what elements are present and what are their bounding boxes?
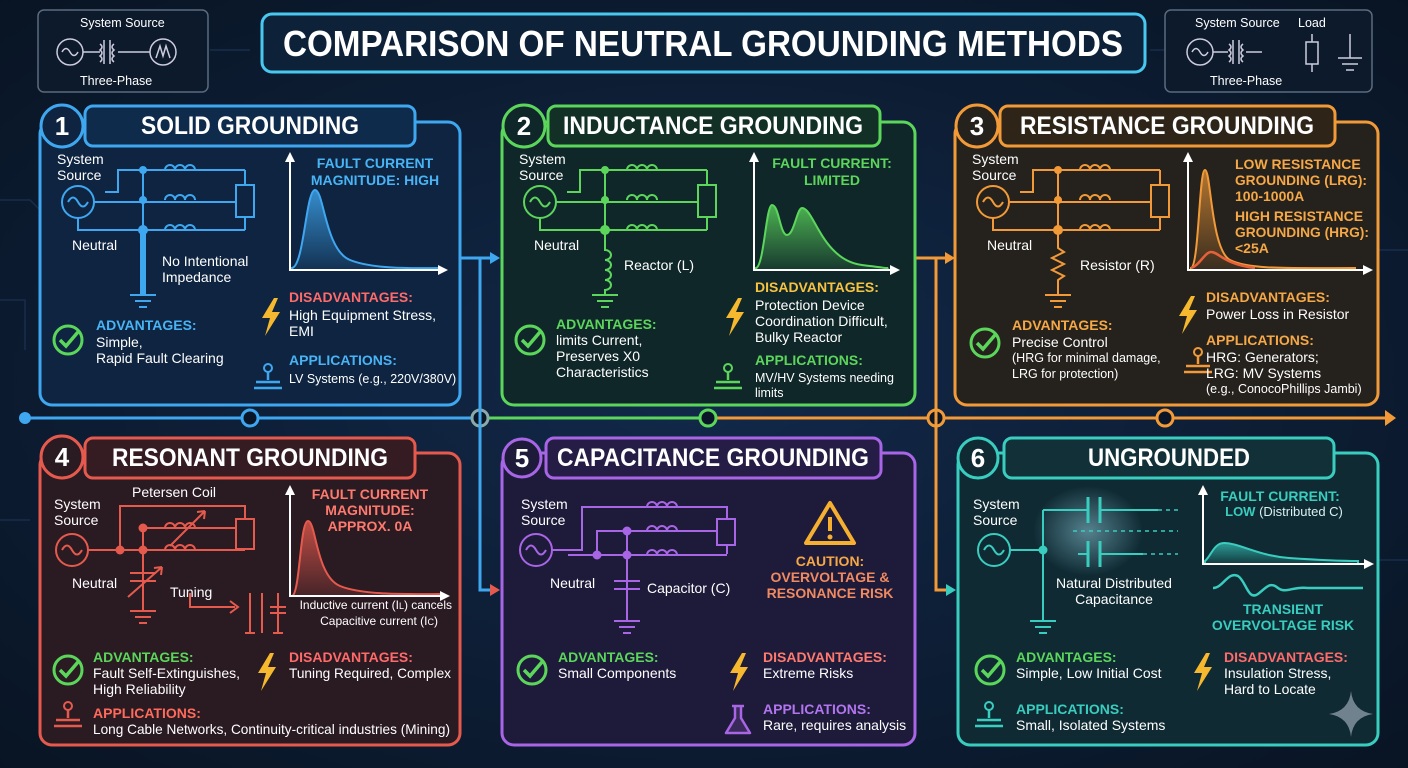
advantages 1: ADVANTAGES: bbox=[96, 317, 197, 333]
connector bus lines bbox=[19, 252, 1396, 596]
panel 6: ungrounded bbox=[958, 438, 1378, 745]
corner diagram: left: Three-Phase bbox=[80, 74, 152, 88]
panel 1: solid grounding: Impedance bbox=[162, 269, 231, 285]
chart 1: FAULT CURRENT bbox=[317, 155, 434, 171]
circuit 4 bbox=[56, 506, 286, 633]
corner diagram: right: Three-Phase bbox=[1210, 74, 1282, 88]
advantages 5 bbox=[518, 649, 676, 684]
number badge 3: 3 bbox=[970, 111, 984, 141]
applications 5 (flask) bbox=[726, 701, 906, 733]
header 5 bbox=[546, 438, 881, 478]
applications 2 bbox=[714, 352, 894, 400]
applications 3: APPLICATIONS: bbox=[1206, 332, 1314, 348]
panel 4: resonant grounding: Petersen Coil bbox=[132, 484, 216, 500]
chart 6: TRANSIENT bbox=[1243, 601, 1323, 617]
panel 1: solid grounding bbox=[40, 105, 460, 405]
chart 6: FAULT CURRENT: bbox=[1220, 488, 1340, 504]
circuit 6 bbox=[978, 486, 1178, 633]
chart 6: LOW (Distributed C) bbox=[1225, 504, 1343, 519]
title bbox=[262, 14, 1145, 72]
advantages 4: Fault Self-Extinguishes, bbox=[93, 665, 240, 681]
advantages 3 bbox=[971, 317, 1161, 381]
advantages 2: limits Current, bbox=[556, 332, 642, 348]
circuit 1 bbox=[62, 165, 254, 307]
panel 1: solid grounding: Neutral bbox=[72, 237, 117, 253]
advantages 3: (HRG for minimal damage, bbox=[1012, 351, 1161, 365]
chart 3 bbox=[1183, 152, 1373, 275]
disadvantages 1: High Equipment Stress, bbox=[289, 307, 436, 323]
panel 1: solid grounding: No Intentional bbox=[162, 253, 248, 269]
chart 4 bbox=[285, 485, 450, 601]
advantages 4: High Reliability bbox=[93, 681, 186, 697]
panel 5: capacitance grounding: System bbox=[521, 496, 568, 512]
number badge 4 bbox=[41, 436, 83, 478]
applications 1: APPLICATIONS: bbox=[289, 352, 397, 368]
panel 2: inductance grounding: Neutral bbox=[534, 237, 579, 253]
number badge 6 bbox=[958, 438, 998, 478]
number badge 5: 5 bbox=[515, 443, 529, 473]
corner diagram: right: Load bbox=[1298, 16, 1326, 30]
chart 2: LIMITED bbox=[804, 172, 860, 188]
panel 2: inductance grounding: System bbox=[519, 151, 566, 167]
disadvantages 5: Extreme Risks bbox=[763, 665, 853, 681]
advantages 2 bbox=[516, 316, 657, 380]
corner diagram: right: System Source bbox=[1195, 16, 1280, 30]
panel 3: resistance grounding: Source bbox=[972, 167, 1017, 183]
panel 2: inductance grounding bbox=[502, 105, 915, 405]
panel 4: resonant grounding: System bbox=[54, 496, 101, 512]
number badge 6: 6 bbox=[971, 443, 985, 473]
disadvantages 1 bbox=[262, 289, 436, 339]
panel 5: capacitance grounding bbox=[502, 438, 915, 745]
advantages 6: Simple, Low Initial Cost bbox=[1016, 665, 1162, 681]
number badge 5 bbox=[503, 439, 541, 477]
applications 3: (e.g., ConocoPhillips Jambi) bbox=[1206, 382, 1362, 396]
panel 5: capacitance grounding: Capacitor (C) bbox=[647, 580, 730, 596]
chart 3: HIGH RESISTANCE bbox=[1235, 208, 1363, 224]
applications 1 bbox=[254, 352, 456, 388]
chart 4: FAULT CURRENT bbox=[312, 486, 429, 502]
disadvantages 6 bbox=[1194, 649, 1348, 697]
caution icon and text: OVERVOLTAGE & bbox=[770, 569, 890, 585]
panel 3: resistance grounding: Resistor (R) bbox=[1080, 257, 1155, 273]
disadvantages 3 bbox=[1179, 289, 1350, 334]
panel 3: resistance grounding: System bbox=[972, 151, 1019, 167]
advantages 5: Small Components bbox=[558, 665, 676, 681]
caution icon and text: RESONANCE RISK bbox=[767, 585, 893, 601]
header 2 bbox=[548, 106, 880, 146]
advantages 2: Preserves X0 bbox=[556, 348, 640, 364]
disadvantages 5 bbox=[730, 649, 887, 691]
disadvantages 6: Insulation Stress, bbox=[1224, 665, 1331, 681]
applications 3: HRG: Generators; bbox=[1206, 349, 1319, 365]
chart 3: GROUNDING (LRG): bbox=[1235, 172, 1367, 188]
applications 4: Long Cable Networks, Continuity-critical industries (Mining) bbox=[93, 721, 450, 737]
header 1 bbox=[85, 106, 415, 146]
panel 4: resonant grounding bbox=[40, 436, 460, 745]
advantages 6: ADVANTAGES: bbox=[1016, 649, 1117, 665]
panel 4: resonant grounding: Capacitive current (IC) bbox=[320, 614, 438, 628]
chart 2 bbox=[749, 152, 900, 275]
applications 2: limits bbox=[755, 386, 783, 400]
header 3: RESISTANCE GROUNDING bbox=[1020, 112, 1314, 140]
applications 6 bbox=[975, 701, 1165, 733]
sparkle bbox=[1329, 691, 1373, 737]
advantages 3: Precise Control bbox=[1012, 334, 1108, 350]
disadvantages 2: Protection Device bbox=[755, 297, 865, 313]
applications 6: Small, Isolated Systems bbox=[1016, 717, 1165, 733]
number badge 3 bbox=[956, 105, 998, 147]
panel 6: ungrounded: System bbox=[973, 496, 1020, 512]
header 4 bbox=[85, 438, 415, 478]
chart 1 bbox=[285, 152, 448, 275]
advantages 4 bbox=[54, 649, 240, 697]
applications 5 (flask): APPLICATIONS: bbox=[763, 701, 871, 717]
chart 6: OVERVOLTAGE RISK bbox=[1212, 617, 1354, 633]
header 6 bbox=[1004, 438, 1334, 478]
disadvantages 4: DISADVANTAGES: bbox=[289, 649, 413, 665]
applications 2: APPLICATIONS: bbox=[755, 352, 863, 368]
panel 3: resistance grounding bbox=[955, 105, 1378, 405]
applications 1: LV Systems (e.g., 220V/380V) bbox=[289, 372, 456, 386]
applications 5 (flask): Rare, requires analysis bbox=[763, 717, 906, 733]
disadvantages 6: DISADVANTAGES: bbox=[1224, 649, 1348, 665]
circuit 2 bbox=[524, 165, 716, 307]
advantages 4: ADVANTAGES: bbox=[93, 649, 194, 665]
disadvantages 2 bbox=[726, 279, 888, 345]
applications 4 bbox=[54, 702, 450, 737]
panel 5: capacitance grounding: Neutral bbox=[550, 575, 595, 591]
applications 6: APPLICATIONS: bbox=[1016, 701, 1124, 717]
chart 4: APPROX. 0A bbox=[328, 518, 412, 534]
number badge 2 bbox=[503, 105, 545, 147]
disadvantages 2: DISADVANTAGES: bbox=[755, 279, 879, 295]
panel 2: inductance grounding: Reactor (L) bbox=[624, 257, 694, 273]
chart 1: MAGNITUDE: HIGH bbox=[311, 172, 439, 188]
panel 4: resonant grounding: Neutral bbox=[72, 575, 117, 591]
panel 6: ungrounded: Capacitance bbox=[1075, 591, 1153, 607]
number badge 2: 2 bbox=[517, 111, 531, 141]
circuit 3 bbox=[977, 165, 1169, 307]
advantages 1 bbox=[54, 317, 224, 366]
disadvantages 2: Coordination Difficult, bbox=[755, 313, 888, 329]
disadvantages 5: DISADVANTAGES: bbox=[763, 649, 887, 665]
header 1: SOLID GROUNDING bbox=[141, 112, 359, 140]
number badge 4: 4 bbox=[55, 442, 70, 472]
circuit 5 bbox=[520, 502, 735, 633]
disadvantages 4: Tuning Required, Complex bbox=[289, 665, 451, 681]
advantages 1: Simple, bbox=[96, 334, 143, 350]
number badge 1 bbox=[41, 105, 83, 147]
panel 4: resonant grounding: Tuning bbox=[170, 584, 212, 600]
number badge 1: 1 bbox=[55, 111, 69, 141]
panel 4: resonant grounding: Source bbox=[54, 512, 99, 528]
panel 6: ungrounded: Source bbox=[973, 512, 1018, 528]
chart 3: 100-1000A bbox=[1235, 188, 1304, 204]
header 4: RESONANT GROUNDING bbox=[112, 444, 388, 472]
chart 4: MAGNITUDE: bbox=[325, 502, 415, 518]
advantages 1: Rapid Fault Clearing bbox=[96, 350, 224, 366]
panel 5: capacitance grounding: Source bbox=[521, 512, 566, 528]
disadvantages 2: Bulky Reactor bbox=[755, 329, 842, 345]
advantages 5: ADVANTAGES: bbox=[558, 649, 659, 665]
chart 3: GROUNDING (HRG): bbox=[1235, 224, 1369, 240]
header 6: UNGROUNDED bbox=[1088, 444, 1250, 472]
applications 3 bbox=[1184, 332, 1362, 396]
disadvantages 4 bbox=[258, 649, 451, 691]
disadvantages 3: Power Loss in Resistor bbox=[1206, 306, 1350, 322]
advantages 2: Characteristics bbox=[556, 364, 649, 380]
panel 1: solid grounding: System bbox=[57, 151, 104, 167]
corner diagram: left bbox=[38, 10, 208, 92]
disadvantages 6: Hard to Locate bbox=[1224, 681, 1316, 697]
panel 4: resonant grounding: Inductive current (IL) cancels bbox=[300, 598, 452, 612]
header 3 bbox=[1000, 106, 1335, 146]
applications 3: LRG: MV Systems bbox=[1206, 365, 1321, 381]
advantages 3: LRG for protection) bbox=[1012, 367, 1118, 381]
chart 2: FAULT CURRENT: bbox=[772, 155, 892, 171]
advantages 6 bbox=[976, 649, 1162, 684]
disadvantages 1: EMI bbox=[289, 323, 314, 339]
panel 6: ungrounded: Natural Distributed bbox=[1056, 575, 1172, 591]
caution icon and text: CAUTION: bbox=[796, 553, 864, 569]
applications 2: MV/HV Systems needing bbox=[755, 371, 894, 385]
header 5: CAPACITANCE GROUNDING bbox=[557, 444, 869, 472]
disadvantages 1: DISADVANTAGES: bbox=[289, 289, 413, 305]
advantages 3: ADVANTAGES: bbox=[1012, 317, 1113, 333]
header 2: INDUCTANCE GROUNDING bbox=[563, 112, 863, 140]
panel 2: inductance grounding: Source bbox=[519, 167, 564, 183]
advantages 2: ADVANTAGES: bbox=[556, 316, 657, 332]
applications 4: APPLICATIONS: bbox=[93, 705, 201, 721]
title: COMPARISON OF NEUTRAL GROUNDING METHODS bbox=[283, 23, 1123, 64]
disadvantages 3: DISADVANTAGES: bbox=[1206, 289, 1330, 305]
caution icon and text bbox=[767, 503, 893, 601]
corner diagram: right bbox=[1165, 10, 1372, 92]
panel 3: resistance grounding: Neutral bbox=[987, 237, 1032, 253]
panel 1: solid grounding: Source bbox=[57, 167, 102, 183]
chart 3: <25A bbox=[1235, 240, 1269, 256]
chart 3: LOW RESISTANCE bbox=[1235, 156, 1361, 172]
chart 6 bbox=[1198, 485, 1374, 633]
corner diagram: left: System Source bbox=[80, 16, 165, 30]
